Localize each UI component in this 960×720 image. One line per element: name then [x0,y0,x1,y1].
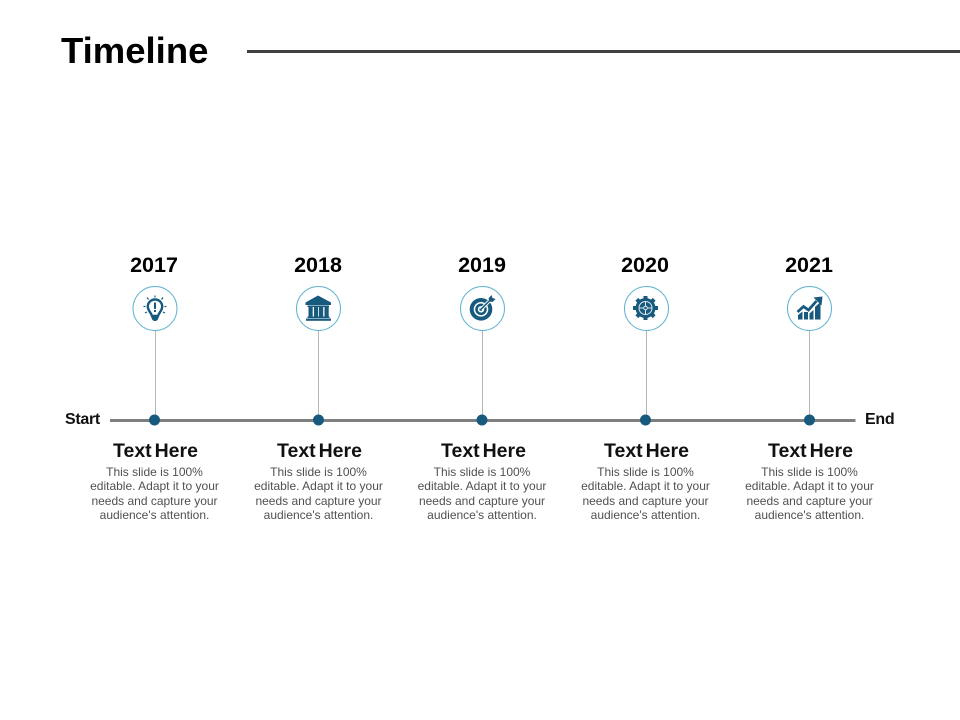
icon: target with arrow [472,295,496,319]
heading: column 3: Text Here [441,440,526,462]
icon: light bulb [144,296,166,321]
end label: End [865,411,894,428]
body: column 3: needs and capture your [419,494,545,508]
body: column 4: editable. Adapt it to your [581,479,710,493]
body: column 5 [745,465,874,522]
body: column 5: This slide is 100% [761,465,858,479]
timeline markers [149,414,815,426]
icon: bank building [306,296,331,321]
body: column 5: audience's attention. [755,508,864,522]
body: column 3: editable. Adapt it to your [418,479,546,493]
heading: column 2: Text Here [277,440,362,462]
body: column 4: needs and capture your [582,494,709,508]
body: column 3: This slide is 100% [434,465,530,479]
heading: column 5: Text Here [768,440,853,462]
year 2020: 2020 [621,253,669,277]
icon: gear [633,296,658,320]
body: column 1: needs and capture your [91,494,218,508]
year 2018: 2018 [294,253,342,277]
connector stems [156,330,810,420]
body: column 5: editable. Adapt it to your [745,479,874,493]
year 2021: 2021 [785,253,833,277]
timeline axis [110,419,856,422]
body: column 2: audience's attention. [264,508,373,522]
body: column 4: This slide is 100% [597,465,694,479]
body: column 2: editable. Adapt it to your [254,479,383,493]
body: column 2 [254,465,383,522]
icon rings [133,286,832,330]
body: column 3: audience's attention. [427,508,537,522]
body: column 4 [581,465,710,522]
body: column 1: editable. Adapt it to your [90,479,219,493]
body: column 3 [418,465,546,522]
body: column 4: audience's attention. [591,508,700,522]
title: Timeline [61,30,208,71]
heading: column 1: Text Here [113,440,198,462]
body: column 1: audience's attention. [100,508,209,522]
body: column 1 [90,465,219,522]
body: column 5: needs and capture your [746,494,873,508]
year 2019: 2019 [458,253,506,277]
heading: column 4: Text Here [604,440,689,462]
body: column 2: needs and capture your [255,494,382,508]
year 2017: 2017 [130,253,178,277]
body: column 2: This slide is 100% [270,465,367,479]
start label: Start [65,411,100,428]
body: column 1: This slide is 100% [106,465,203,479]
icon: growth chart [798,296,822,320]
title rule [247,50,960,53]
